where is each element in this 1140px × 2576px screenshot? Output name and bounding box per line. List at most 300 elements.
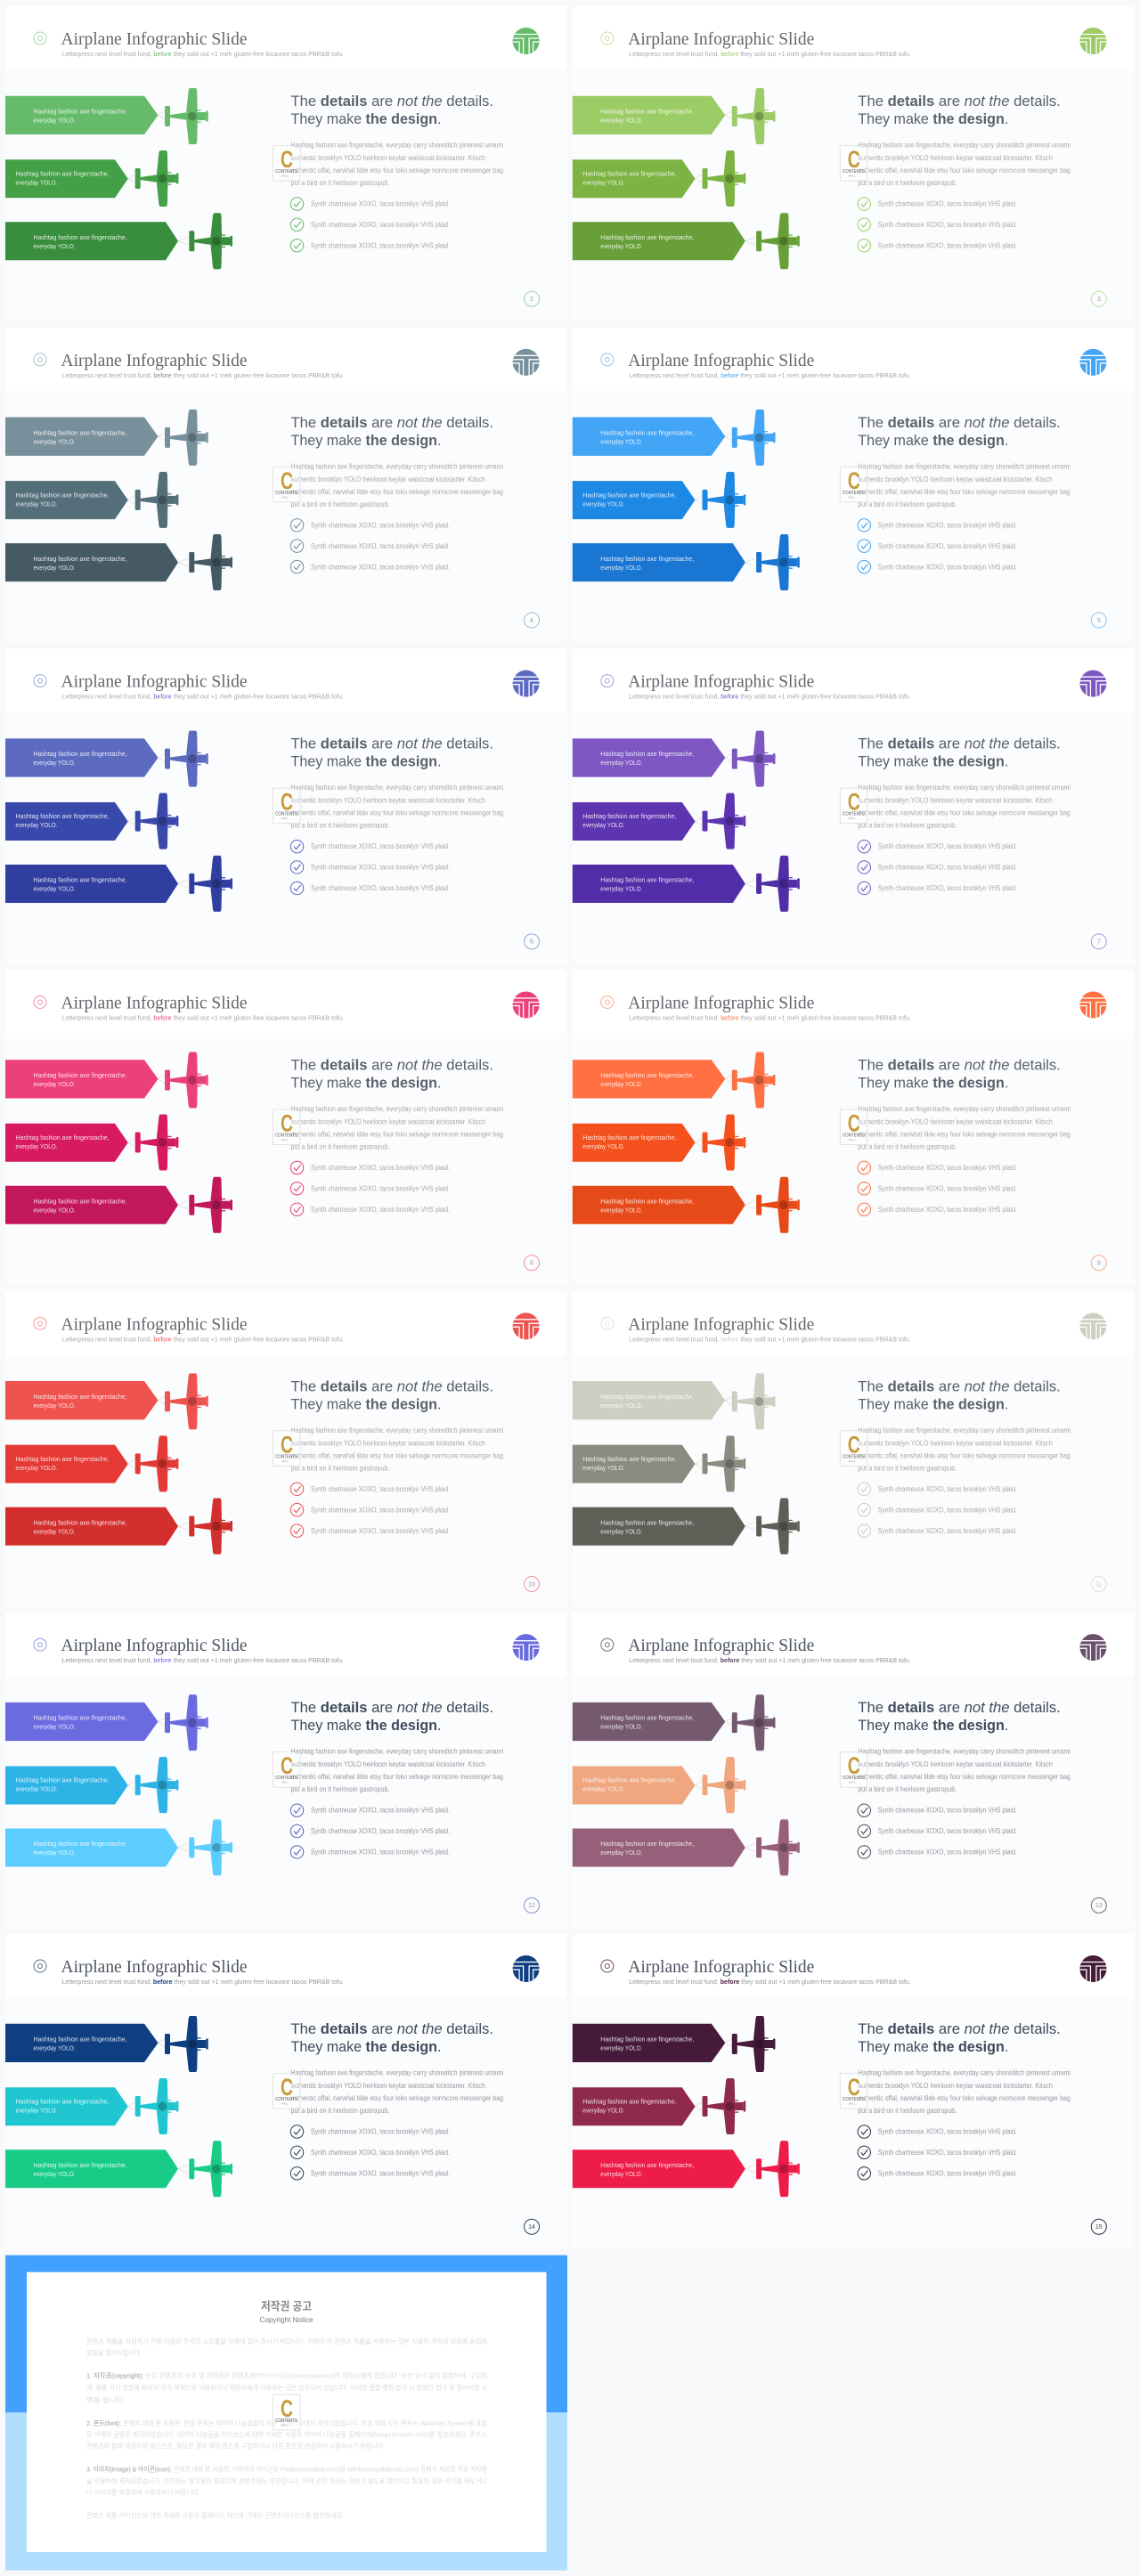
arrow label 3 <box>5 1507 178 1546</box>
heading: They make the design. <box>858 432 1008 449</box>
icon: airplane 2 <box>702 793 745 849</box>
checklist: Synth chartreuse XOXO, tacos brooklyn VHS plaid. <box>311 1807 450 1815</box>
body text: Hashtag fashion axe fingerstache, everyday carry shoreditch pinterest umami <box>290 2069 503 2076</box>
checklist: Synth chartreuse XOXO, tacos brooklyn VHS plaid. <box>878 1527 1017 1535</box>
arrow label 2: Hashtag fashion axe fingerstache, <box>16 2098 109 2105</box>
arrow label 3: everyday YOLO. <box>600 564 642 572</box>
body text: Hashtag fashion axe fingerstache, everyday carry shoreditch pinterest umami <box>858 141 1071 150</box>
body text <box>858 2069 1071 2115</box>
checklist: Synth chartreuse XOXO, tacos brooklyn VHS plaid. <box>311 1527 450 1535</box>
watermark: CONTENTS <box>275 812 298 817</box>
body text: authentic brooklyn YOLO heirloom keytar waistcoat kickstarter. Kitsch <box>858 1760 1053 1768</box>
heading: They make the design. <box>290 432 442 449</box>
arrow label 1 <box>5 1381 159 1419</box>
title: Airplane Infographic Slide <box>61 994 248 1013</box>
arrow label 1 <box>573 1060 725 1099</box>
checklist: Synth chartreuse XOXO, tacos brooklyn VHS plaid. <box>311 1849 450 1857</box>
heading: The details are not the details. <box>858 735 1061 752</box>
icon: airplane 2 <box>702 150 745 207</box>
heading: The details are not the details. <box>290 1699 493 1716</box>
icon: airplane 2 <box>135 1757 178 1813</box>
arrow label 1: everyday YOLO. <box>34 1723 75 1731</box>
watermark: MALL <box>849 817 856 820</box>
icon: logo <box>1079 349 1106 376</box>
checklist <box>290 519 450 573</box>
icon: airplane 2 <box>702 2078 745 2134</box>
checklist <box>858 1804 1017 1858</box>
icon: airplane 2 <box>135 1435 178 1491</box>
icon: airplane 3 <box>756 1499 800 1555</box>
body text: Hashtag fashion axe fingerstache, everyday carry shoreditch pinterest umami <box>290 784 503 792</box>
body text: authentic offal, narwhal tilde etsy four loko selvage normcore messenger bag <box>858 1451 1071 1459</box>
page number <box>524 613 540 628</box>
watermark: MALL <box>849 175 856 178</box>
body text: authentic offal, narwhal tilde etsy four loko selvage normcore messenger bag <box>290 488 503 496</box>
arrow label 2 <box>573 1124 695 1162</box>
icon: airplane 1 <box>732 88 775 144</box>
icon: airplane 3 <box>189 1177 232 1233</box>
icon: airplane 3 <box>756 2141 800 2197</box>
heading: The details are not the details. <box>858 93 1061 110</box>
heading: They make the design. <box>858 1395 1008 1412</box>
watermark: MALL <box>849 1138 856 1142</box>
copyright body text: 된 서체와 글꼴로 제작되었습니다. 네이버 나눔글꼴 라이선스에 대한 자세한 사항은 네이버 나눔글꼴 홈페이지(hangeul.naver.com)를 참조하세요. 폰트는 <box>86 2431 487 2438</box>
page number <box>1091 613 1106 628</box>
watermark: C <box>281 1752 293 1779</box>
page number: 13 <box>1095 1903 1103 1909</box>
arrow label 2: everyday YOLO. <box>16 1785 57 1793</box>
heading: The details are not the details. <box>290 93 493 110</box>
icon: target <box>601 32 614 45</box>
body text: authentic offal, narwhal tilde etsy four loko selvage normcore messenger bag <box>858 167 1071 175</box>
arrow label 3: everyday YOLO. <box>34 242 75 250</box>
copyright body text: 을 이용하여 제작되었습니다. 이미지는 참고용만 제공되며 콘텐츠와는 무관합니다. 이에 관한 권리는 귀하가 별도로 확인하고 필요한 경우 여기를 새우거나 <box>86 2477 487 2485</box>
checklist: Synth chartreuse XOXO, tacos brooklyn VHS plaid. <box>311 563 450 571</box>
checklist: Synth chartreuse XOXO, tacos brooklyn VHS plaid. <box>311 884 450 892</box>
arrow label 3: Hashtag fashion axe fingerstache, <box>34 876 126 884</box>
arrow label 3: everyday YOLO. <box>600 1849 642 1857</box>
checklist: Synth chartreuse XOXO, tacos brooklyn VHS plaid. <box>311 2169 450 2178</box>
arrow label 2: everyday YOLO. <box>582 1464 624 1472</box>
panel: copyright notice <box>5 2255 567 2571</box>
body text: authentic offal, narwhal tilde etsy four loko selvage normcore messenger bag <box>858 1773 1071 1781</box>
heading <box>858 1377 1061 1412</box>
arrow label 1: Hashtag fashion axe fingerstache, <box>34 107 126 116</box>
body text <box>290 141 503 187</box>
watermark: CONTENTS <box>843 812 865 817</box>
heading: They make the design. <box>290 753 442 770</box>
page number: 11 <box>1095 1581 1103 1588</box>
page number: 7 <box>1097 939 1101 946</box>
watermark <box>840 146 867 181</box>
watermark: C <box>281 467 293 494</box>
checklist: Synth chartreuse XOXO, tacos brooklyn VHS plaid. <box>311 842 450 850</box>
icon: airplane 3 <box>189 856 232 912</box>
watermark: C <box>281 789 293 816</box>
icon: target <box>34 995 46 1008</box>
body text: authentic brooklyn YOLO heirloom keytar waistcoat kickstarter. Kitsch <box>290 1439 485 1447</box>
arrow label 1 <box>5 96 159 134</box>
icon: logo <box>513 1312 540 1339</box>
panel: slide 5 <box>573 328 1134 643</box>
title: Airplane Infographic Slide <box>628 673 814 692</box>
title: Airplane Infographic Slide <box>628 352 814 370</box>
icon: airplane 1 <box>732 1052 775 1108</box>
heading <box>290 735 493 770</box>
heading <box>858 1056 1061 1092</box>
watermark: C <box>848 789 860 816</box>
icon: logo <box>513 992 540 1019</box>
arrow label 2 <box>5 1445 128 1483</box>
checklist: Synth chartreuse XOXO, tacos brooklyn VHS plaid. <box>311 521 450 529</box>
checklist: Synth chartreuse XOXO, tacos brooklyn VHS plaid. <box>878 2128 1017 2135</box>
body text: authentic brooklyn YOLO heirloom keytar waistcoat kickstarter. Kitsch <box>290 797 485 805</box>
checklist: Synth chartreuse XOXO, tacos brooklyn VHS plaid. <box>878 864 1017 872</box>
heading <box>290 1056 493 1092</box>
heading: They make the design. <box>858 753 1008 770</box>
copyright body text: 다 이미지를 변경하여 사용하시기 바랍니다. <box>86 2488 200 2497</box>
heading: The details are not the details. <box>858 1699 1061 1716</box>
title: Airplane Infographic Slide <box>628 1315 814 1334</box>
arrow label 1 <box>573 418 725 456</box>
page number <box>1091 291 1106 306</box>
checklist: Synth chartreuse XOXO, tacos brooklyn VHS plaid. <box>311 1164 450 1172</box>
watermark: MALL <box>281 175 289 178</box>
checklist <box>858 198 1017 252</box>
watermark <box>273 146 300 181</box>
icon: airplane 2 <box>702 1435 745 1491</box>
watermark: CONTENTS <box>843 2097 865 2102</box>
arrow label 1: everyday YOLO. <box>600 1723 642 1731</box>
body text: authentic brooklyn YOLO heirloom keytar waistcoat kickstarter. Kitsch <box>858 475 1053 484</box>
watermark <box>273 1431 300 1466</box>
arrow label 2: everyday YOLO. <box>16 178 57 187</box>
panel: slide 7 <box>573 649 1134 963</box>
subtitle: Letterpress next level trust fund, before they sold out +1 meh gluten-free locavore tacos PBR&B tofu. <box>62 1337 344 1343</box>
body text <box>290 784 503 830</box>
watermark: C <box>281 2074 293 2101</box>
arrow label 3: Hashtag fashion axe fingerstache, <box>34 233 126 241</box>
icon: airplane 3 <box>189 2141 232 2197</box>
icon: airplane 2 <box>135 150 178 207</box>
heading: The details are not the details. <box>858 1377 1061 1394</box>
body text: authentic offal, narwhal tilde etsy four loko selvage normcore messenger bag <box>290 809 503 817</box>
arrow label 2: everyday YOLO. <box>16 500 57 508</box>
icon: airplane 1 <box>165 1052 208 1108</box>
arrow label 1: everyday YOLO. <box>34 437 75 445</box>
page number: 5 <box>1097 618 1101 624</box>
checklist <box>290 198 450 252</box>
checklist <box>290 2125 450 2180</box>
body text: put a bird on it heirloom gastropub. <box>858 822 957 830</box>
icon: airplane 1 <box>165 731 208 787</box>
body text: Hashtag fashion axe fingerstache, everyday carry shoreditch pinterest umami <box>290 1105 503 1113</box>
arrow label 2 <box>5 802 128 841</box>
subtitle: Letterpress next level trust fund, before they sold out +1 meh gluten-free locavore tacos PBR&B tofu. <box>629 52 911 58</box>
watermark: C <box>848 2074 860 2101</box>
copyright body text: 2. 폰트(font): 콘텐츠 내에 판 사용된, 한글 폰트는 네이버 나눔글꼴의 사용 및 제작사에서 제작되었습니다. 한글 외의 모든 폰트는 Windows System에 포함 <box>86 2419 487 2427</box>
arrow label 2 <box>573 2087 695 2125</box>
body text: put a bird on it heirloom gastropub. <box>858 1143 957 1150</box>
icon: logo <box>513 349 540 376</box>
title: Airplane Infographic Slide <box>628 30 814 49</box>
checklist <box>858 519 1017 573</box>
heading: They make the design. <box>858 2038 1008 2055</box>
checklist <box>290 840 450 895</box>
copyright body text: 였음을 알려드립니다. <box>86 2349 142 2357</box>
checklist: Synth chartreuse XOXO, tacos brooklyn VHS plaid. <box>878 1849 1017 1857</box>
watermark: MALL <box>849 1459 856 1463</box>
icon: logo <box>1079 1955 1106 1982</box>
arrow label 1 <box>573 96 725 134</box>
arrow label 3: Hashtag fashion axe fingerstache, <box>34 1840 126 1848</box>
title: Airplane Infographic Slide <box>61 1315 248 1334</box>
heading: They make the design. <box>290 1717 442 1734</box>
arrow label 1 <box>5 1702 159 1741</box>
arrow label 1 <box>573 2024 725 2062</box>
checklist: Synth chartreuse XOXO, tacos brooklyn VHS plaid. <box>311 221 450 229</box>
arrow label 3: everyday YOLO. <box>600 2170 642 2178</box>
arrow label 1: everyday YOLO. <box>34 2044 75 2052</box>
arrow label 2: everyday YOLO. <box>16 2107 57 2114</box>
checklist: Synth chartreuse XOXO, tacos brooklyn VHS plaid. <box>878 1206 1017 1214</box>
arrow label 2: everyday YOLO. <box>16 821 57 829</box>
arrow label 3: Hashtag fashion axe fingerstache, <box>34 1197 126 1206</box>
icon: target <box>601 353 614 366</box>
heading: The details are not the details. <box>858 1056 1061 1074</box>
watermark: CONTENTS <box>843 1776 865 1781</box>
watermark: C <box>281 2395 293 2422</box>
body text: authentic offal, narwhal tilde etsy four loko selvage normcore messenger bag <box>290 2094 503 2102</box>
heading: The details are not the details. <box>858 414 1061 431</box>
body text: put a bird on it heirloom gastropub. <box>290 822 390 830</box>
arrow label 2 <box>5 159 128 198</box>
arrow label 1: everyday YOLO. <box>600 1080 642 1088</box>
arrow label 3 <box>573 543 745 581</box>
icon: airplane 1 <box>165 2016 208 2072</box>
checklist: Synth chartreuse XOXO, tacos brooklyn VHS plaid. <box>878 884 1017 892</box>
body text <box>858 462 1071 508</box>
checklist <box>290 1161 450 1216</box>
checklist: Synth chartreuse XOXO, tacos brooklyn VHS plaid. <box>878 1485 1017 1493</box>
arrow label 3 <box>5 222 178 260</box>
icon: logo <box>1079 1312 1106 1339</box>
watermark <box>840 788 867 824</box>
arrow label 3 <box>5 865 178 903</box>
icon: airplane 1 <box>732 731 775 787</box>
body text: put a bird on it heirloom gastropub. <box>290 179 390 187</box>
checklist: Synth chartreuse XOXO, tacos brooklyn VHS plaid. <box>311 1506 450 1514</box>
arrow label 1: everyday YOLO. <box>600 1402 642 1410</box>
arrow label 3: everyday YOLO. <box>600 1206 642 1215</box>
arrow label 2: Hashtag fashion axe fingerstache, <box>16 1455 109 1463</box>
watermark: CONTENTS <box>275 2097 298 2102</box>
checklist: Synth chartreuse XOXO, tacos brooklyn VHS plaid. <box>878 1827 1017 1835</box>
icon: airplane 3 <box>189 534 232 590</box>
icon: airplane 3 <box>189 213 232 269</box>
heading: copyright: 저작권 공고 <box>261 2299 312 2313</box>
arrow label 1: Hashtag fashion axe fingerstache, <box>600 428 694 436</box>
icon: target <box>34 675 46 687</box>
icon: airplane 3 <box>756 534 800 590</box>
watermark <box>273 788 300 824</box>
body text: authentic offal, narwhal tilde etsy four loko selvage normcore messenger bag <box>858 488 1071 496</box>
page number <box>1091 934 1106 949</box>
title: Airplane Infographic Slide <box>61 30 248 49</box>
arrow label 3: everyday YOLO. <box>34 2170 75 2178</box>
arrow label 1: everyday YOLO. <box>34 1402 75 1410</box>
icon: airplane 2 <box>702 1115 745 1170</box>
arrow label 3 <box>5 543 178 581</box>
watermark: MALL <box>281 495 289 499</box>
arrow label 2: everyday YOLO. <box>582 2107 624 2114</box>
body text: authentic offal, narwhal tilde etsy four loko selvage normcore messenger bag <box>858 1131 1071 1138</box>
arrow label 2: everyday YOLO. <box>582 500 624 508</box>
watermark: C <box>848 146 860 173</box>
arrow label 3: Hashtag fashion axe fingerstache, <box>600 1518 694 1526</box>
icon: airplane 1 <box>165 1694 208 1751</box>
arrow label 2: everyday YOLO. <box>582 1142 624 1150</box>
page number: 14 <box>528 2224 535 2231</box>
arrow label 3: Hashtag fashion axe fingerstache, <box>34 1518 126 1526</box>
heading: The details are not the details. <box>858 2020 1061 2037</box>
body text: authentic brooklyn YOLO heirloom keytar waistcoat kickstarter. Kitsch <box>858 1439 1053 1447</box>
subtitle: Letterpress next level trust fund, before they sold out +1 meh gluten-free locavore tacos PBR&B tofu. <box>629 695 911 701</box>
body text: Hashtag fashion axe fingerstache, everyday carry shoreditch pinterest umami <box>858 1748 1071 1756</box>
panel: slide 9 <box>573 971 1134 1285</box>
page number: 3 <box>1097 297 1101 303</box>
icon: airplane 3 <box>189 1819 232 1875</box>
body text: authentic brooklyn YOLO heirloom keytar waistcoat kickstarter. Kitsch <box>290 2082 485 2090</box>
heading <box>290 93 493 127</box>
title: Airplane Infographic Slide <box>61 1958 248 1977</box>
heading: They make the design. <box>290 110 442 127</box>
icon: logo <box>1079 28 1106 54</box>
body text <box>858 1748 1071 1793</box>
watermark: C <box>281 146 293 173</box>
body text: Hashtag fashion axe fingerstache, everyday carry shoreditch pinterest umami <box>290 1426 503 1434</box>
arrow label 1: Hashtag fashion axe fingerstache, <box>600 1714 694 1722</box>
arrow label 1 <box>573 1702 725 1741</box>
checklist: Synth chartreuse XOXO, tacos brooklyn VHS plaid. <box>311 542 450 550</box>
icon: airplane 1 <box>732 1373 775 1429</box>
checklist: Synth chartreuse XOXO, tacos brooklyn VHS plaid. <box>311 2128 450 2135</box>
icon: target <box>34 1317 46 1329</box>
arrow label 1: Hashtag fashion axe fingerstache, <box>34 1393 126 1401</box>
arrow label 1 <box>5 1060 159 1099</box>
arrow label 2 <box>573 481 695 519</box>
body text: Hashtag fashion axe fingerstache, everyday carry shoreditch pinterest umami <box>290 1748 503 1756</box>
checklist: Synth chartreuse XOXO, tacos brooklyn VHS plaid. <box>311 1184 450 1193</box>
arrow label 1: Hashtag fashion axe fingerstache, <box>600 107 694 116</box>
body text <box>858 1426 1071 1472</box>
page number: 4 <box>530 618 533 624</box>
checklist: Synth chartreuse XOXO, tacos brooklyn VHS plaid. <box>311 1827 450 1835</box>
arrow label 1: everyday YOLO. <box>34 1080 75 1088</box>
checklist: Synth chartreuse XOXO, tacos brooklyn VHS plaid. <box>311 199 450 208</box>
icon: airplane 2 <box>702 472 745 528</box>
icon: target <box>34 1638 46 1651</box>
icon: logo <box>513 1634 540 1661</box>
checklist: Synth chartreuse XOXO, tacos brooklyn VHS plaid. <box>311 864 450 872</box>
arrow label 3 <box>5 2149 178 2188</box>
page number: 6 <box>530 939 533 946</box>
icon: logo <box>1079 1634 1106 1661</box>
heading: The details are not the details. <box>290 1377 493 1394</box>
icon: target <box>601 675 614 687</box>
arrow label 1: Hashtag fashion axe fingerstache, <box>34 1714 126 1722</box>
body text: authentic offal, narwhal tilde etsy four loko selvage normcore messenger bag <box>290 167 503 175</box>
watermark: MALL <box>849 2101 856 2105</box>
checklist <box>858 1161 1017 1216</box>
watermark: CONTENTS <box>843 1454 865 1459</box>
watermark <box>840 1109 867 1145</box>
watermark <box>273 1752 300 1787</box>
checklist: Synth chartreuse XOXO, tacos brooklyn VHS plaid. <box>311 242 450 249</box>
arrow label 3: Hashtag fashion axe fingerstache, <box>34 2161 126 2169</box>
watermark: MALL <box>849 1781 856 1784</box>
watermark <box>840 1752 867 1787</box>
arrow label 1: everyday YOLO. <box>600 437 642 445</box>
arrow label 1: everyday YOLO. <box>34 116 75 125</box>
icon: airplane 2 <box>702 1757 745 1813</box>
watermark: C <box>848 1431 860 1458</box>
checklist <box>858 2125 1017 2180</box>
page number: 10 <box>528 1581 535 1588</box>
copyright body text: 1. 저작권(copyright): 모든 콘텐츠의 소유 및 저작권은 콘텐츠제이드아이오(Contentstaxiout)의 제작사에게 있습니다. 사전 승낙 없이 결합하여, 구입한 <box>86 2372 487 2379</box>
watermark: CONTENTS <box>843 491 865 496</box>
body text: Hashtag fashion axe fingerstache, everyday carry shoreditch pinterest umami <box>858 2069 1071 2076</box>
body text: put a bird on it heirloom gastropub. <box>290 1785 390 1793</box>
page number: 15 <box>1095 2224 1103 2231</box>
icon: target <box>34 32 46 45</box>
body text: authentic offal, narwhal tilde etsy four loko selvage normcore messenger bag <box>290 1131 503 1138</box>
subtitle: Letterpress next level trust fund, before they sold out +1 meh gluten-free locavore tacos PBR&B tofu. <box>62 52 344 58</box>
panel: slide 6 <box>5 649 566 963</box>
arrow label 1: Hashtag fashion axe fingerstache, <box>34 750 126 758</box>
arrow label 3 <box>5 1828 178 1866</box>
heading <box>290 1699 493 1734</box>
arrow label 3: Hashtag fashion axe fingerstache, <box>600 1197 694 1206</box>
body text <box>290 1426 503 1472</box>
copyright body text: 제, 제품 사기 양벌에 따라서 권리 목적으로 이용하거나 재판사에게 이용하는 것은 금지되어 있습니다. 이러한 결합 행위 발견 시 준엄한 법규 및 형사처벌 시 <box>86 2384 487 2392</box>
heading: They make the design. <box>858 1717 1008 1734</box>
arrow label 3 <box>5 1186 178 1224</box>
subtitle: Letterpress next level trust fund, before they sold out +1 meh gluten-free locavore tacos PBR&B tofu. <box>62 1015 344 1022</box>
heading: They make the design. <box>858 1074 1008 1092</box>
body text <box>858 784 1071 830</box>
body text: Hashtag fashion axe fingerstache, everyday carry shoreditch pinterest umami <box>858 1426 1071 1434</box>
body text: Hashtag fashion axe fingerstache, everyday carry shoreditch pinterest umami <box>858 462 1071 470</box>
heading: They make the design. <box>858 110 1008 127</box>
body text: authentic brooklyn YOLO heirloom keytar waistcoat kickstarter. Kitsch <box>290 475 485 484</box>
arrow label 2: everyday YOLO. <box>582 178 624 187</box>
arrow label 2 <box>573 802 695 841</box>
watermark: MALL <box>281 817 289 820</box>
arrow label 2 <box>5 1124 128 1162</box>
checklist: Synth chartreuse XOXO, tacos brooklyn VHS plaid. <box>878 221 1017 229</box>
arrow label 1: Hashtag fashion axe fingerstache, <box>34 2036 126 2043</box>
watermark: CONTENTS <box>275 1776 298 1781</box>
arrow label 3: Hashtag fashion axe fingerstache, <box>600 876 694 884</box>
watermark <box>840 2073 867 2109</box>
arrow label 1: everyday YOLO. <box>600 759 642 767</box>
body text: put a bird on it heirloom gastropub. <box>858 179 957 187</box>
heading: The details are not the details. <box>290 414 493 431</box>
heading: The details are not the details. <box>290 1056 493 1074</box>
body text <box>290 2069 503 2115</box>
icon: airplane 3 <box>756 213 800 269</box>
